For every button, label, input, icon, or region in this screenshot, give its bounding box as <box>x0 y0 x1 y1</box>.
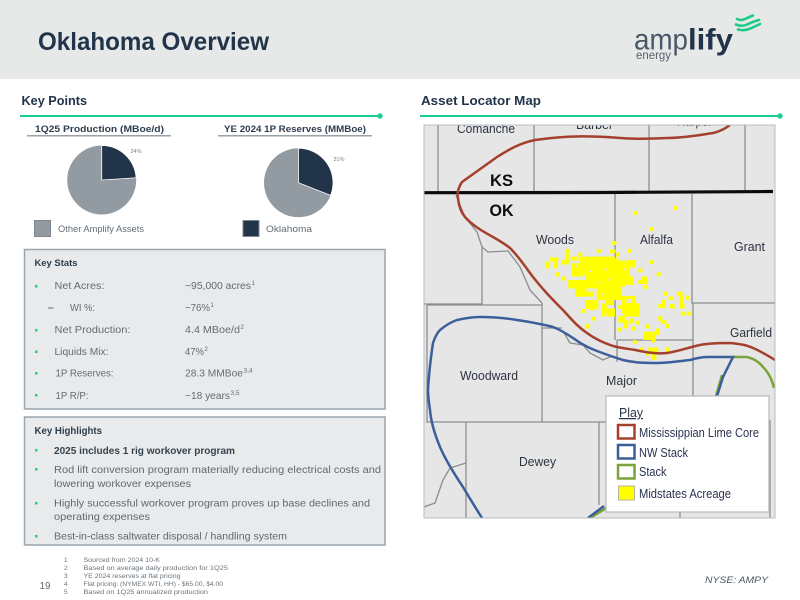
county boundaries <box>424 125 775 518</box>
county labels: Garfield <box>730 326 772 340</box>
logo: amplify energy: energy <box>636 50 671 62</box>
ticker: NYSE: AMPY <box>705 575 769 585</box>
map panel <box>424 115 775 518</box>
stat: liquids mix: 2 <box>204 347 208 353</box>
county labels: Dewey <box>519 455 557 469</box>
footnotes: Flat pricing: (NYMEX WTI, HH) - $65.00, $4.00 <box>84 581 223 588</box>
stat: net acres: Net Acres: <box>54 281 104 292</box>
stat: working interest: WI %: <box>70 303 95 314</box>
stat: 1P R/P: ~18 years <box>185 391 230 402</box>
county labels: Grant <box>734 240 766 254</box>
pie legend: Other Amplify Assets <box>58 224 144 235</box>
panel: key highlights: Key Highlights <box>34 425 102 437</box>
pie chart: YE 2024 1P reserves: YE 2024 1P Reserves (MMBoe) <box>224 124 366 135</box>
stat: net acres: 1 <box>252 281 256 287</box>
stat: liquids mix <box>54 347 208 358</box>
county labels: Comanche <box>457 122 515 136</box>
map legend: Midstates Acreage <box>639 487 731 501</box>
county labels: Alfalfa <box>640 233 673 247</box>
stat: 1P reserves: 1P Reserves: <box>56 368 114 380</box>
county labels: KS <box>490 171 513 190</box>
county labels <box>457 115 772 469</box>
panel: key highlights: Rod lift conversion program materially reducing electrical costs and <box>54 464 381 476</box>
panel: key highlights: Highly successful workover program proves up base declines and <box>54 498 370 510</box>
stat: liquids mix: Liquids Mix: <box>54 347 108 358</box>
stat: 1P reserves <box>56 368 253 380</box>
logo: amplify energy: lify <box>688 24 733 56</box>
heading: asset locator map <box>420 93 783 119</box>
footnotes: 2 <box>64 565 68 572</box>
footnotes: Sourced from 2024 10-K <box>84 557 161 564</box>
stat: working interest <box>70 303 214 314</box>
pie chart: 1Q25 production: 24% <box>130 149 142 155</box>
logo: amplify energy <box>634 16 760 62</box>
footnotes: YE 2024 reserves at flat pricing <box>84 573 181 580</box>
stat: net production: 2 <box>240 325 244 331</box>
state line <box>424 192 773 193</box>
county labels: Major <box>606 374 637 388</box>
footnotes: 3 <box>64 573 68 580</box>
pie legend <box>34 220 313 236</box>
county labels: OK <box>490 201 514 220</box>
pie chart: YE 2024 1P reserves: 31% <box>334 157 345 163</box>
logo: amplify energy: amp <box>634 24 688 56</box>
footnotes <box>64 557 228 596</box>
stat: liquids mix: 47% <box>185 347 204 358</box>
county labels: Harper <box>677 115 712 129</box>
acreage squares <box>545 206 691 360</box>
panel: key highlights <box>24 417 385 545</box>
stat: net production: 4.4 MBoe/d <box>185 325 240 336</box>
stat: net production: Net Production: <box>54 325 130 336</box>
county labels: Woodward <box>460 369 518 383</box>
pie chart: 1Q25 production <box>27 124 171 214</box>
page number: 19 <box>40 580 51 592</box>
pie legend: Oklahoma <box>266 224 313 235</box>
map legend: NW Stack <box>639 446 689 460</box>
panel: key highlights: Best-in-class saltwater disposal / handling system <box>54 530 287 542</box>
footnotes: Based on average daily production for 1Q25 <box>84 565 228 572</box>
stat: working interest: ~76% <box>185 303 210 314</box>
footnotes: Based on 1Q25 annualized production <box>84 589 208 596</box>
Mississippian Lime Core boundary <box>458 125 775 360</box>
panel: key highlights: operating expenses <box>54 511 150 523</box>
pie chart: YE 2024 1P reserves <box>218 124 372 217</box>
header band <box>0 0 800 79</box>
panel: key highlights: lowering workover expenses <box>54 478 191 490</box>
stat: 1P reserves: 3,4 <box>244 368 253 374</box>
map legend: Stack <box>639 465 667 479</box>
stat: net acres <box>54 281 256 292</box>
county labels: Barber <box>576 118 613 132</box>
pie chart: 1Q25 production: 1Q25 Production (MBoe/d) <box>35 124 164 135</box>
NW Stack boundary <box>428 317 733 518</box>
panel: key highlights: 2025 includes 1 rig workover program <box>54 445 235 457</box>
stat: 1P R/P <box>56 391 240 402</box>
stat: working interest: 1 <box>210 303 214 309</box>
heading: key points: Key Points <box>22 93 87 108</box>
title: Oklahoma Overview <box>38 28 270 56</box>
county labels: Woods <box>536 233 574 247</box>
stat: net production <box>54 325 244 336</box>
stat: 1P R/P: 3,5 <box>230 391 240 397</box>
map legend <box>606 396 769 512</box>
stat: net acres: ~95,000 acres <box>185 281 251 292</box>
map legend: Mississippian Lime Core <box>639 426 759 440</box>
Stack boundary <box>590 357 774 518</box>
footnotes: 4 <box>64 581 68 588</box>
panel: key stats <box>24 250 385 409</box>
stat: 1P R/P: 1P R/P: <box>56 391 88 402</box>
panel: key stats: Key Stats <box>34 258 78 269</box>
footnotes: 1 <box>64 557 68 564</box>
stat: 1P reserves: 28.3 MMBoe <box>185 368 243 380</box>
heading: key points <box>20 93 383 119</box>
map legend: Play <box>619 406 644 420</box>
heading: asset locator map: Asset Locator Map <box>421 93 541 108</box>
footnotes: 5 <box>64 589 68 596</box>
